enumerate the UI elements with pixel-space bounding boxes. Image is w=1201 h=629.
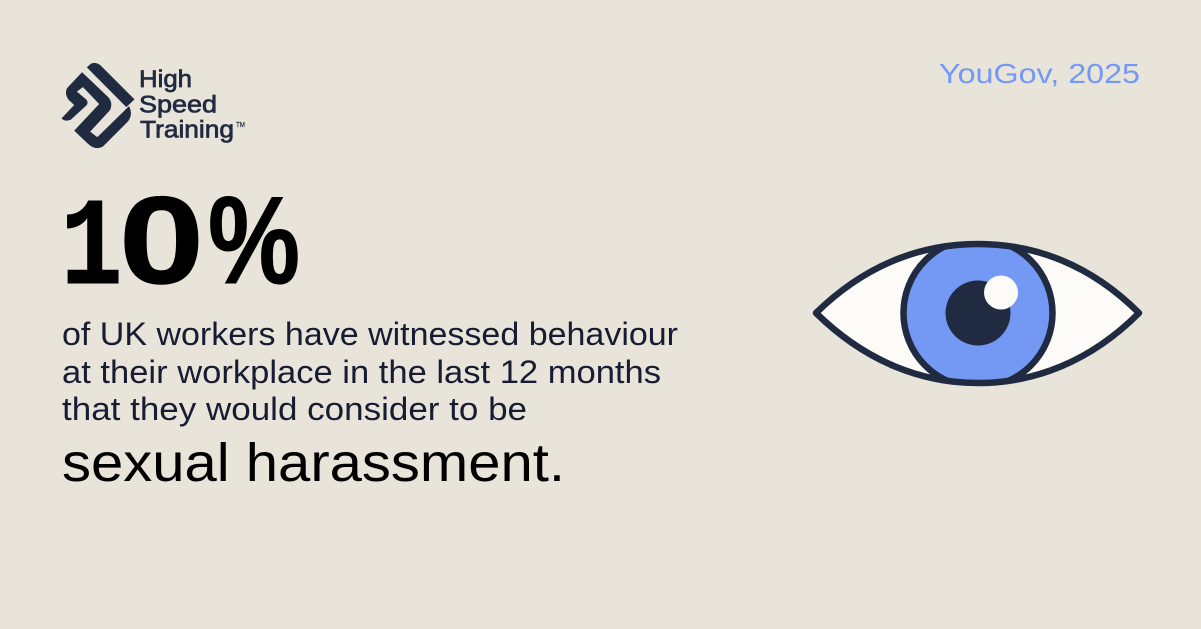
source label: YouGov, 2025 [939,58,1140,89]
pupil [946,280,1010,346]
headline statistic: 1 [60,181,122,321]
body text: at their workplace in the last 12 months [62,354,661,390]
body text: of UK workers have witnessed behaviour [62,316,678,352]
icon: eye [816,238,1139,388]
eye white [816,244,1139,383]
logo wordmark: Speed [139,92,217,118]
headline statistic: 0 [119,172,204,310]
headline statistic: % [208,172,300,310]
headline statistic [60,172,300,321]
logo wordmark: High [139,66,192,93]
infographic canvas [62,62,1142,482]
emphasis text: sexual harassment. [62,433,565,493]
logo wordmark [139,66,245,144]
logo: High Speed Training [62,63,245,148]
icon: logo mark [62,63,134,148]
body text [62,316,678,427]
highlight [984,276,1018,310]
logo wordmark: TM [236,122,245,129]
iris [904,238,1052,388]
logo wordmark: Training [140,116,234,144]
eye outline [816,244,1139,383]
body text: that they would consider to be [62,391,527,427]
